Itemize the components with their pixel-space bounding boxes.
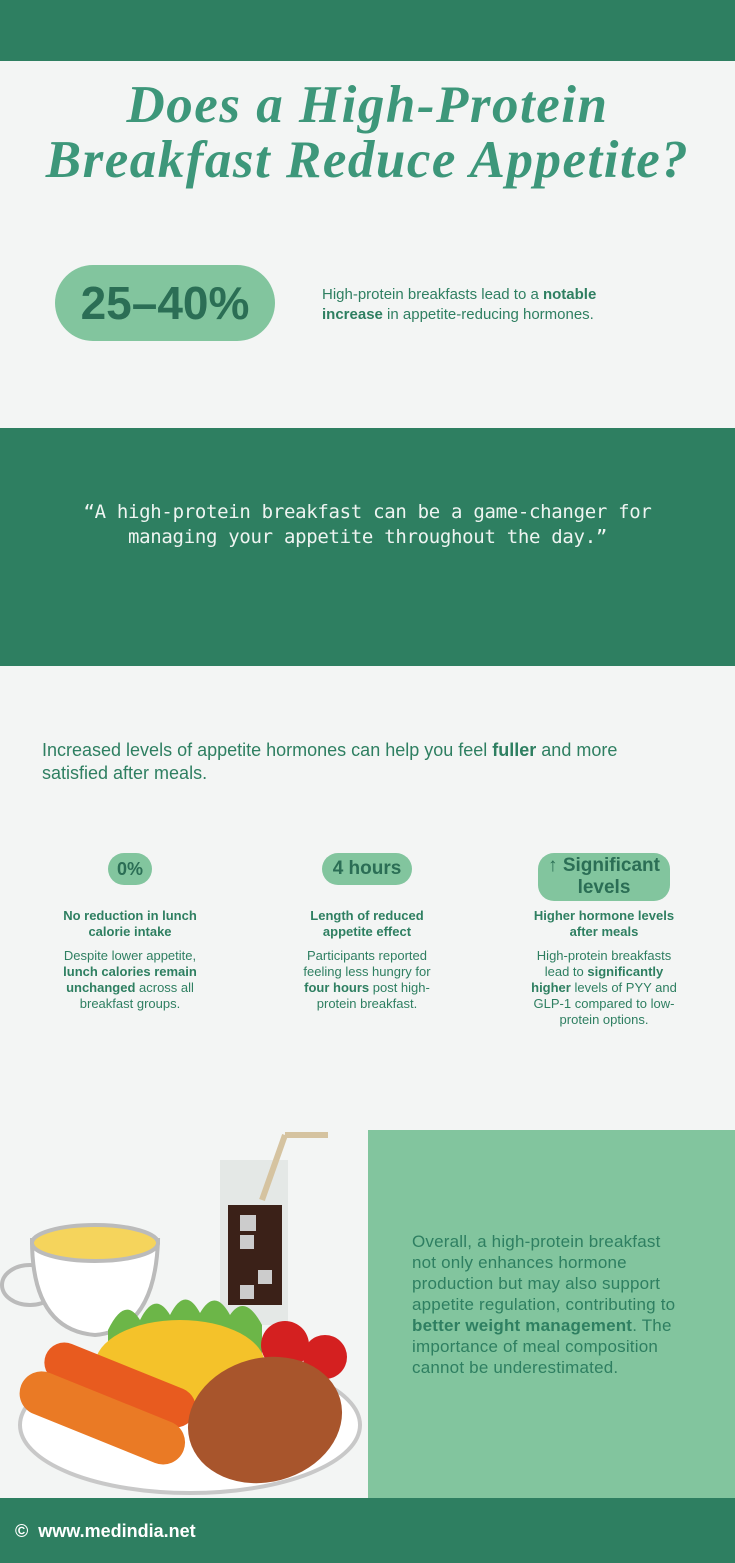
summary panel bbox=[368, 1130, 735, 1498]
title bbox=[45, 76, 689, 189]
heading: appetite effect bbox=[323, 924, 411, 939]
stat pill: 25–40% bbox=[55, 265, 275, 341]
body: Participants reported feeling less hungry for four hours post high-protein breakfast. bbox=[303, 948, 431, 1011]
straw and glass bbox=[220, 1135, 328, 1325]
sausages bbox=[13, 1336, 202, 1471]
title: Breakfast Reduce Appetite? bbox=[46, 131, 689, 189]
illustration: breakfast plate bbox=[0, 1132, 362, 1495]
heading: Higher hormone levels bbox=[534, 908, 674, 923]
heading: calorie intake bbox=[88, 924, 172, 939]
summary text: Overall, a high-protein breakfast not only enhances hormone production but may also support appetite regulation, contributing to better weight management. The importance of meal composition cannot be underestimated. bbox=[412, 1232, 675, 1377]
stat column: significant levels bbox=[531, 853, 677, 1027]
plate bbox=[20, 1357, 360, 1493]
heading bbox=[534, 908, 674, 939]
pill significant: levels bbox=[578, 877, 630, 898]
quote text bbox=[83, 501, 652, 548]
top bar bbox=[0, 0, 735, 61]
stat pill: 25–40%: 25–40% bbox=[81, 277, 249, 329]
stat description: High-protein breakfasts lead to a notable increase in appetite-reducing hormones. bbox=[322, 286, 596, 323]
heading: No reduction in lunch bbox=[63, 908, 197, 923]
eggs bbox=[95, 1320, 265, 1410]
footer credit: © www.medindia.net bbox=[15, 1521, 196, 1541]
intro paragraph: Increased levels of appetite hormones can help you feel fuller and more satisfied after meals. bbox=[42, 740, 617, 783]
bread bbox=[174, 1340, 356, 1500]
tomatoes bbox=[261, 1321, 347, 1379]
heading bbox=[310, 908, 424, 939]
heading: after meals bbox=[570, 924, 638, 939]
footer bbox=[0, 1498, 735, 1563]
pill 0% bbox=[108, 853, 152, 885]
pill significant: ↑ Significant bbox=[548, 855, 660, 876]
title: Does a High-Protein bbox=[127, 76, 608, 134]
pill 4 hours bbox=[322, 853, 412, 885]
heading bbox=[63, 908, 197, 939]
body: Despite lower appetite, lunch calories remain unchanged across all breakfast groups. bbox=[63, 948, 197, 1011]
stat column: 4 hours bbox=[303, 853, 431, 1011]
soup cup bbox=[2, 1225, 158, 1335]
pill 0%: 0% bbox=[117, 859, 143, 879]
heading: Length of reduced bbox=[310, 908, 424, 923]
body: High-protein breakfasts lead to significantly higher levels of PYY and GLP-1 compared to low-protein options. bbox=[531, 948, 677, 1027]
stat column: 0% bbox=[63, 853, 197, 1011]
quote text: “A high-protein breakfast can be a game-changer for bbox=[83, 501, 652, 523]
lettuce bbox=[108, 1299, 262, 1355]
quote text: managing your appetite throughout the day.” bbox=[128, 526, 607, 548]
quote band bbox=[0, 428, 735, 666]
pill 4 hours: 4 hours bbox=[333, 858, 401, 879]
pill significant bbox=[538, 853, 670, 901]
